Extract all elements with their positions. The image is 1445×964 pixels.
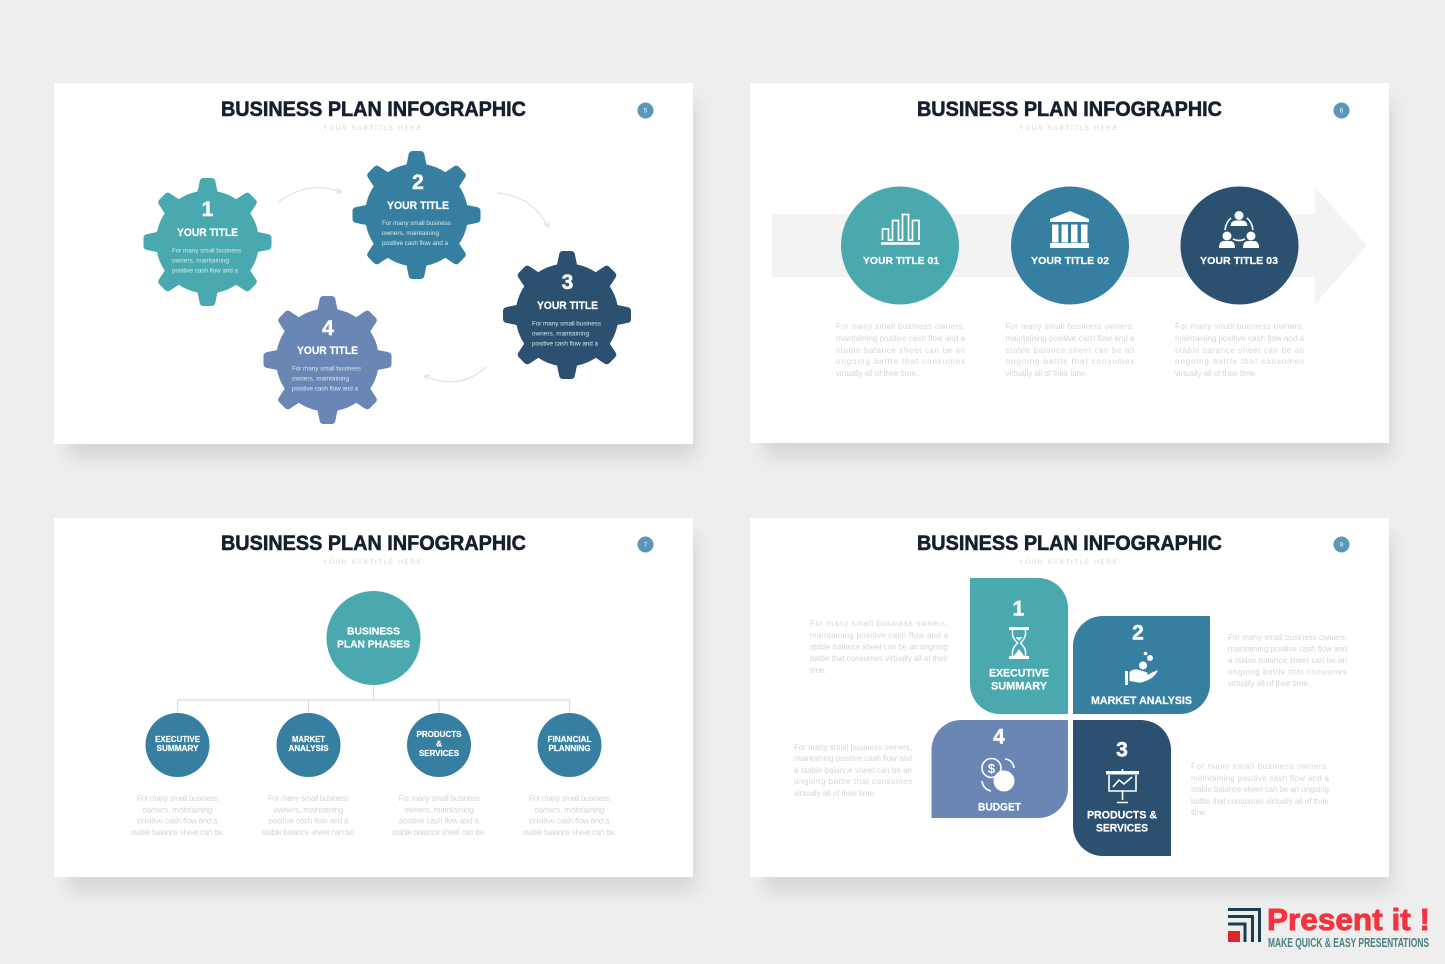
text block: bottom left [794, 743, 912, 798]
label: YOUR TITLE 01 [863, 255, 939, 267]
text block: market analysis: owners, maintaining [274, 806, 344, 814]
text block: bottom left: maintaining positive cash flow and [794, 754, 912, 763]
text block 3: stable balance sheet can be an [1175, 346, 1304, 355]
gear 3: 3 [562, 271, 573, 294]
text block: products and services: For many small business [398, 794, 480, 803]
subtitle: YOUR SUBTITLE HERE [1019, 559, 1119, 566]
panel: arrow slide [750, 83, 1389, 443]
text block: top right: maintaining positive cash flow and [1228, 644, 1347, 654]
icon: hourglass [1009, 627, 1029, 659]
text block 1: For many small business owners, [836, 322, 965, 331]
circle 2 [1011, 186, 1129, 304]
text block: top right: For many small business owners, [1228, 633, 1347, 642]
gear 1: positive cash flow and a [172, 268, 238, 274]
subtitle: YOUR SUBTITLE HERE [323, 559, 423, 566]
gear 4: For many small business [292, 366, 361, 372]
page badge: 5 [644, 109, 648, 115]
text block 2: ongoing battle that consumes [1006, 357, 1134, 366]
logo: Present it: Present it ! [1267, 902, 1430, 937]
arrow: step 1 to 2 [279, 188, 342, 202]
logo: Present it [1228, 902, 1430, 950]
text block 1: stable balance sheet can be an [836, 346, 965, 355]
text block: top left: stable balance sheet can be an ongoing [810, 642, 948, 652]
petal 4: budget [932, 720, 1068, 818]
gear 4: YOUR TITLE [297, 345, 358, 357]
text block 2 [1006, 322, 1135, 378]
petal 3: products and services: SERVICES [1096, 822, 1148, 834]
text block 1: maintaining positive cash flow and a [836, 334, 966, 343]
node: market analysis [276, 713, 340, 777]
gear 2: YOUR TITLE [387, 200, 449, 212]
page badge: 6 [1340, 109, 1344, 115]
text block 1: ongoing battle that consumes [836, 357, 965, 366]
petal 3: products and services [1073, 720, 1171, 856]
node: financial planning [538, 713, 602, 777]
page badge [638, 102, 654, 118]
node: market analysis: MARKET [292, 735, 325, 744]
icon: team [1219, 211, 1259, 248]
petal 2: market analysis: MARKET ANALYSIS [1091, 695, 1192, 707]
petal 4: budget: 4 [993, 726, 1005, 748]
text block: executive summary [130, 794, 224, 837]
gear 2: positive cash flow and a [382, 240, 448, 247]
text block: bottom right: stable balance sheet can be an ongoing [1191, 785, 1329, 794]
text block: bottom right [1191, 762, 1330, 817]
page badge [1334, 536, 1350, 552]
circle 1 [841, 186, 959, 304]
label: YOUR TITLE 03 [1200, 255, 1278, 267]
subtitle: YOUR SUBTITLE HERE [1019, 125, 1119, 132]
root node: BUSINESS [347, 626, 400, 638]
text block: financial planning: stable balance sheet can be. [522, 828, 616, 837]
page badge: 7 [644, 543, 648, 549]
text block: bottom right: For many small business owners, [1191, 762, 1329, 771]
arrow: step 2 to 3 [497, 193, 549, 228]
text block: executive summary: stable balance sheet can be. [130, 828, 224, 837]
icon: coins: $ [988, 761, 996, 776]
text block: market analysis: positive cash flow and a [268, 816, 349, 826]
text block 3: maintaining positive cash flow and a [1175, 334, 1305, 343]
text block: top right [1228, 633, 1347, 688]
text block: top right: virtually all of their time. [1228, 679, 1310, 688]
root node: PLAN PHASES [337, 638, 410, 650]
text block: financial planning: positive cash flow and a [530, 816, 610, 826]
circle 3 [1180, 186, 1298, 304]
text block 2: For many small business owners, [1006, 322, 1134, 331]
label: YOUR TITLE 02 [1031, 255, 1109, 267]
logo mark [1228, 908, 1261, 942]
text block 3 [1175, 322, 1305, 378]
gear 2: owners, maintaining [382, 230, 439, 237]
text block: top left: For many small business owners, [810, 619, 948, 628]
gear 2: 2 [412, 171, 424, 194]
text block: bottom left: ongoing battle that consumes [794, 777, 912, 786]
gear 3: For many small business [532, 320, 601, 328]
text block: top left: maintaining positive cash flow and a [810, 631, 949, 640]
node: financial planning: PLANNING [548, 744, 590, 753]
text block: bottom left: virtually all of their time. [794, 789, 876, 798]
text block 3: virtually all of their time. [1175, 369, 1257, 378]
petal 3: products and services: PRODUCTS & [1087, 810, 1157, 822]
text block: executive summary: positive cash flow and a [138, 816, 218, 826]
petal 3: products and services: 3 [1116, 738, 1128, 762]
gear 4: 4 [322, 317, 334, 340]
gear 1 [144, 178, 272, 306]
text block: financial planning [522, 794, 616, 837]
text block: bottom left: For many small business owners, [794, 743, 912, 752]
text block: financial planning: owners, maintaining [534, 806, 604, 814]
text block 3: ongoing battle that consumes [1175, 357, 1304, 366]
text block: products and services [392, 794, 486, 837]
connector lines [178, 680, 570, 713]
text block 1: virtually all of their time. [836, 369, 918, 378]
page badge [1334, 102, 1350, 118]
text block: top left: battle that consumes virtually all of their [810, 654, 948, 663]
arrow: step 3 to 4 [424, 367, 486, 382]
panel: quadrant slide [750, 518, 1389, 877]
gear 3: positive cash flow and a [532, 340, 598, 348]
petal 1: executive summary: SUMMARY [991, 680, 1048, 692]
text block 2: maintaining positive cash flow and a [1006, 334, 1135, 343]
petal 4: budget: BUDGET [978, 802, 1021, 814]
page badge: 8 [1340, 543, 1344, 549]
text block: market analysis: For many small business [268, 794, 349, 803]
text block 3: For many small business owners, [1175, 322, 1304, 331]
background arrow [772, 187, 1367, 304]
text block 1 [836, 322, 966, 378]
title: BUSINESS PLAN INFOGRAPHIC [917, 532, 1222, 555]
node: market analysis: ANALYSIS [288, 744, 329, 753]
gear 2: For many small business [382, 220, 451, 227]
icon: presentation board [1106, 769, 1139, 802]
petal 1: executive summary: 1 [1013, 598, 1025, 620]
node: products and services: SERVICES [419, 749, 460, 758]
node: products and services [407, 713, 471, 777]
text block: top left: time. [810, 666, 826, 675]
text block: top right: ongoing battle that consumes [1228, 668, 1347, 676]
gear 1: YOUR TITLE [177, 227, 238, 239]
text block: products and services: stable balance sheet can be. [392, 828, 486, 837]
gear 3: YOUR TITLE [537, 300, 598, 312]
title: BUSINESS PLAN INFOGRAPHIC [221, 98, 526, 121]
text block: executive summary: owners, maintaining [142, 806, 212, 814]
node: financial planning: FINANCIAL [548, 735, 592, 744]
text block: bottom left: a stable balance sheet can be an [794, 766, 912, 775]
gear 4: owners, maintaining [292, 376, 349, 382]
text block: products and services: owners, maintaining [404, 806, 474, 814]
text block 2: virtually all of their time. [1006, 369, 1088, 378]
gear 1: For many small business [172, 248, 241, 254]
gear 1: 1 [202, 198, 214, 221]
gear 3 [503, 251, 631, 379]
node: products and services: & [436, 740, 442, 748]
root node [326, 591, 420, 685]
petal 1: executive summary: EXECUTIVE [989, 668, 1049, 680]
petal 2: market analysis: 2 [1132, 622, 1144, 644]
node: executive summary: SUMMARY [156, 744, 199, 753]
subtitle: YOUR SUBTITLE HERE [323, 125, 423, 132]
node: executive summary [146, 713, 210, 777]
gear 4 [264, 296, 392, 424]
gear 1: owners, maintaining [172, 258, 229, 264]
text block: top right: a stable balance sheet can be an [1228, 656, 1347, 665]
petal 2: market analysis [1073, 616, 1210, 714]
page badge [638, 536, 654, 552]
petal 1: executive summary [970, 578, 1068, 714]
gear 3: owners, maintaining [532, 330, 589, 338]
text block: products and services: positive cash flow and a [399, 816, 480, 826]
node: products and services: PRODUCTS [416, 730, 462, 739]
text block: bottom right: maintaining positive cash flow and a [1191, 774, 1330, 783]
title: BUSINESS PLAN INFOGRAPHIC [221, 532, 526, 555]
gear 4: positive cash flow and a [292, 386, 358, 392]
node: executive summary: EXECUTIVE [155, 735, 201, 744]
text block: executive summary: For many small business [137, 794, 218, 803]
text block: top left [810, 619, 949, 675]
title: BUSINESS PLAN INFOGRAPHIC [917, 98, 1222, 121]
icon: bank [1050, 211, 1089, 248]
text block: bottom right: battle that consumes virtually all of their [1191, 797, 1329, 806]
text block: market analysis [262, 794, 356, 837]
panel: org chart slide [54, 518, 693, 877]
text block: bottom right: time. [1191, 808, 1207, 817]
text block: market analysis: stable balance sheet can be. [262, 828, 356, 837]
text block 2: stable balance sheet can be an [1006, 346, 1134, 355]
gear 2 [352, 151, 480, 279]
icon: bar chart [881, 214, 920, 244]
icon: hand with coins [1125, 652, 1158, 685]
text block: financial planning: For many small business [529, 794, 610, 803]
panel: gears slide [54, 83, 693, 444]
